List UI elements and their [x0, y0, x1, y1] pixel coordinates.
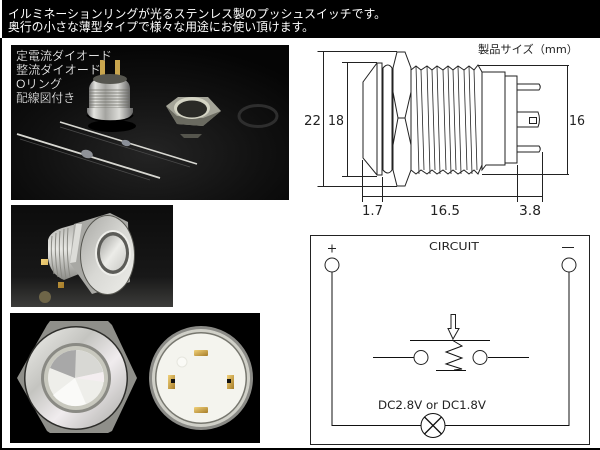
press arrow: [448, 314, 459, 339]
switch outline: [363, 52, 540, 186]
button cap: [363, 63, 382, 175]
positive terminal: [325, 244, 339, 272]
wiring: [332, 272, 569, 426]
dimension labels: 16: [569, 114, 585, 129]
switch body and pins: [87, 60, 136, 132]
gold pins: [41, 259, 64, 288]
unit note: 製品サイズ（mm）: [478, 42, 578, 56]
rear view: [149, 326, 253, 430]
sealing ring: [383, 65, 392, 173]
dimension labels: 18: [328, 114, 344, 129]
O-ring: [239, 106, 277, 126]
dimension lines: [318, 52, 569, 202]
dimension labels: 16.5: [430, 204, 460, 219]
parts label: 定電流ダイオード: [16, 48, 112, 63]
size diagram: [318, 52, 569, 202]
hex nut outline: [393, 52, 411, 186]
terminals: [517, 84, 540, 90]
photo: included parts: [11, 45, 289, 200]
dimension labels: 3.8: [519, 204, 541, 219]
negative terminal: [562, 248, 576, 272]
diodes: [17, 122, 197, 180]
front view: [17, 321, 137, 433]
parts label: 配線図付き: [16, 90, 75, 105]
rear terminals: [168, 350, 234, 413]
lamp: [421, 414, 445, 438]
spring: [446, 340, 462, 370]
rear housing: [482, 72, 505, 170]
circuit title: CIRCUIT: [429, 240, 479, 253]
front face: [80, 215, 135, 295]
switch contacts: [414, 350, 487, 364]
dimension labels: 22: [304, 114, 321, 129]
photo: angled switch: [11, 205, 173, 307]
photo: front and rear views: [10, 313, 260, 443]
threaded body: [48, 224, 84, 280]
hex flange: [70, 213, 130, 294]
circuit diagram: [310, 236, 590, 444]
heading banner: イルミネーションリングが光るステンレス製のプッシュスイッチです。: [8, 6, 386, 21]
parts label: [16, 48, 112, 105]
dimension labels: 1.7: [362, 204, 383, 219]
circuit frame: [310, 236, 590, 444]
parts label: Oリング: [16, 77, 62, 91]
dimension labels: [304, 114, 585, 219]
parts label: 整流ダイオード: [16, 62, 101, 77]
heading banner: 奥行の小さな薄型タイプで様々な用途にお使い頂けます。: [8, 19, 314, 34]
thread: [411, 65, 482, 174]
hex nut: [166, 97, 221, 138]
heading banner: [8, 6, 386, 34]
voltage label: DC2.8V or DC1.8V: [378, 398, 486, 412]
